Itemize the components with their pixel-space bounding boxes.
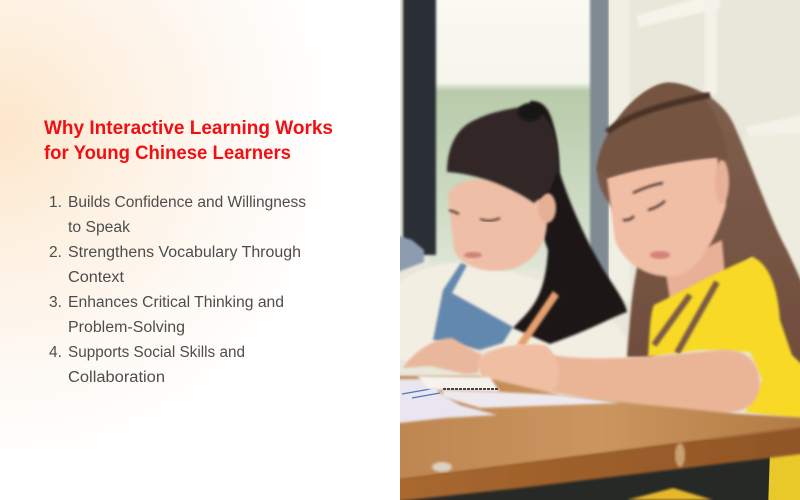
list item 4: 4. [49, 344, 62, 361]
ear [538, 193, 556, 223]
notebook [442, 390, 620, 408]
list item 1: to Speak [68, 219, 130, 236]
desk top [390, 376, 800, 482]
list item 1 [49, 194, 306, 236]
photo: two girls writing at a wooden desk [390, 0, 800, 500]
pinafore strap right [578, 291, 600, 299]
hair top with braid [597, 83, 728, 178]
hair top [447, 107, 558, 203]
list item 3: Enhances Critical Thinking and [68, 294, 284, 311]
eyes and brows [623, 183, 665, 220]
under desk dark [390, 440, 800, 500]
pencil [517, 291, 559, 347]
list item 2: Strengthens Vocabulary Through [68, 244, 301, 261]
hair strands over shirt [654, 282, 717, 353]
girl on the left [390, 101, 629, 374]
ponytail and long hair [513, 101, 627, 344]
arm [545, 350, 760, 413]
list item 2: 2. [49, 244, 62, 261]
heading: Why Interactive Learning Works [44, 118, 333, 139]
yellow skirt below desk [768, 450, 800, 500]
ear [715, 160, 729, 204]
loose papers [390, 379, 497, 424]
white blouse [390, 262, 629, 362]
list item 3 [49, 294, 284, 336]
face [448, 179, 547, 271]
lips [464, 252, 482, 258]
back paper [417, 376, 500, 392]
neck [665, 240, 725, 300]
hair tie [518, 103, 542, 121]
list item 4: Supports Social Skills and [68, 344, 245, 361]
eyes [449, 210, 500, 221]
yellow t-shirt [648, 257, 800, 420]
list item 1: Builds Confidence and Willingness [68, 194, 306, 211]
heading [44, 118, 333, 164]
desk front edge [390, 426, 800, 500]
lips [650, 251, 670, 259]
list item 4: Collaboration [68, 369, 165, 386]
long brown hair [597, 83, 800, 372]
list item 1: 1. [49, 194, 62, 211]
list item 2 [49, 244, 301, 286]
left panel background [0, 0, 400, 500]
left hand [403, 338, 482, 374]
writing hand [478, 344, 559, 397]
list item 2: Context [68, 269, 125, 286]
list item 3: 3. [49, 294, 62, 311]
heading: for Young Chinese Learners [44, 143, 291, 164]
list item 4 [49, 344, 245, 386]
scratch marks [675, 443, 685, 467]
face [607, 157, 726, 277]
girl on the right [478, 83, 800, 420]
desk, notebook and papers [390, 376, 800, 500]
list item 3: Problem-Solving [68, 319, 185, 336]
blue pinafore [433, 263, 513, 350]
window and classroom background [400, 0, 800, 417]
numbered list [49, 194, 306, 386]
